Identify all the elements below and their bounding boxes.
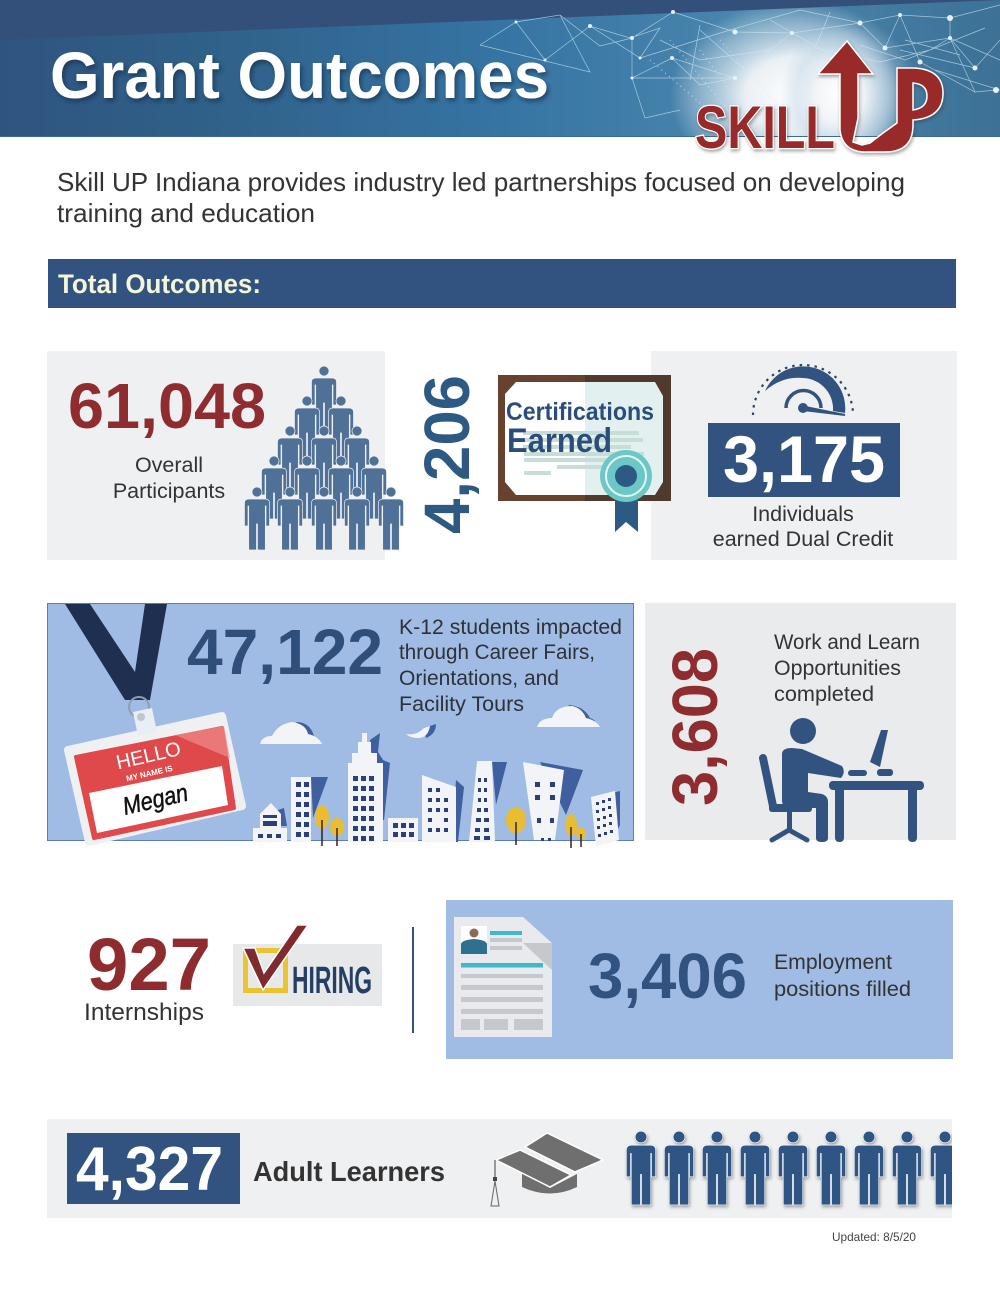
panel: overall participants: 61,048 <box>68 370 266 442</box>
header banner <box>0 0 1000 137</box>
icon: gauge <box>753 365 853 416</box>
panel: work and learn: Opportunities <box>774 656 901 680</box>
intro text: training and education <box>57 198 315 228</box>
panel: employment positions <box>446 900 953 1059</box>
stat: internships: 927 <box>87 923 211 1006</box>
intro text: Skill UP Indiana provides industry led partnerships focused on developing <box>57 167 905 197</box>
icon: name badge with lanyard: HELLO <box>114 738 183 774</box>
icon: graduation cap <box>491 1133 603 1206</box>
panel: dual credit: earned Dual Credit <box>713 527 893 551</box>
icon: certificate: Certifications <box>506 398 654 426</box>
icon: row of people <box>626 1131 960 1205</box>
panel: K-12 students <box>48 604 634 840</box>
panel: K-12 students: 47,122 <box>187 616 383 688</box>
icon: certificate: Earned <box>507 422 612 460</box>
icon: name badge with lanyard <box>65 604 242 842</box>
network pattern <box>480 5 1000 130</box>
icon: person at desk <box>763 718 924 842</box>
panel: K-12 students: Facility Tours <box>399 692 524 716</box>
panel: adult learners: Adult Learners <box>253 1156 445 1187</box>
stat: internships: Internships <box>84 999 204 1026</box>
icon: name badge with lanyard: MY NAME IS <box>125 764 174 783</box>
panel: K-12 students: through Career Fairs, <box>399 640 595 664</box>
icon: people pyramid <box>244 366 404 550</box>
logo: Skill UP: SKILL <box>695 94 835 161</box>
icon: hiring check: HIRING <box>292 960 372 1002</box>
intro text <box>57 167 905 228</box>
panel: overall participants <box>47 351 385 560</box>
section bar: Total Outcomes: Total Outcomes: <box>58 269 261 299</box>
panel: work and learn: completed <box>774 682 874 706</box>
panel: K-12 students: Orientations, and <box>399 666 559 690</box>
icon: hiring check <box>233 925 382 1006</box>
panel: dual credit: Individuals <box>752 502 854 526</box>
panel: K-12 students: K-12 students impacted <box>399 615 622 639</box>
panel: work and learn <box>645 603 956 840</box>
updated date: Updated: 8/5/20 <box>832 1230 916 1244</box>
icon: skyline <box>253 705 620 848</box>
panel: adult learners: 4,327 <box>76 1135 223 1204</box>
title: Grant Outcomes <box>50 38 549 112</box>
panel: employment positions: Employment <box>774 950 892 974</box>
logo: Skill UP <box>695 41 943 161</box>
panel: employment positions: 3,406 <box>588 940 747 1012</box>
panel: overall participants: Participants <box>113 479 225 503</box>
panel: work and learn: Work and Learn <box>774 630 920 654</box>
section bar: Total Outcomes <box>48 259 956 308</box>
icon: name badge with lanyard: Megan <box>120 779 191 821</box>
panel: adult learners <box>47 1119 952 1218</box>
icon: resume <box>454 917 552 1037</box>
number: certifications: 4,206 <box>411 375 483 534</box>
panel: employment positions: positions filled <box>774 977 911 1001</box>
panel: work and learn: 3,608 <box>659 648 731 806</box>
panel: overall participants: Overall <box>135 453 203 477</box>
network nodes <box>514 10 999 93</box>
icon: certificate <box>498 375 671 532</box>
panel: dual credit <box>651 351 957 560</box>
panel: dual credit: 3,175 <box>723 422 885 496</box>
